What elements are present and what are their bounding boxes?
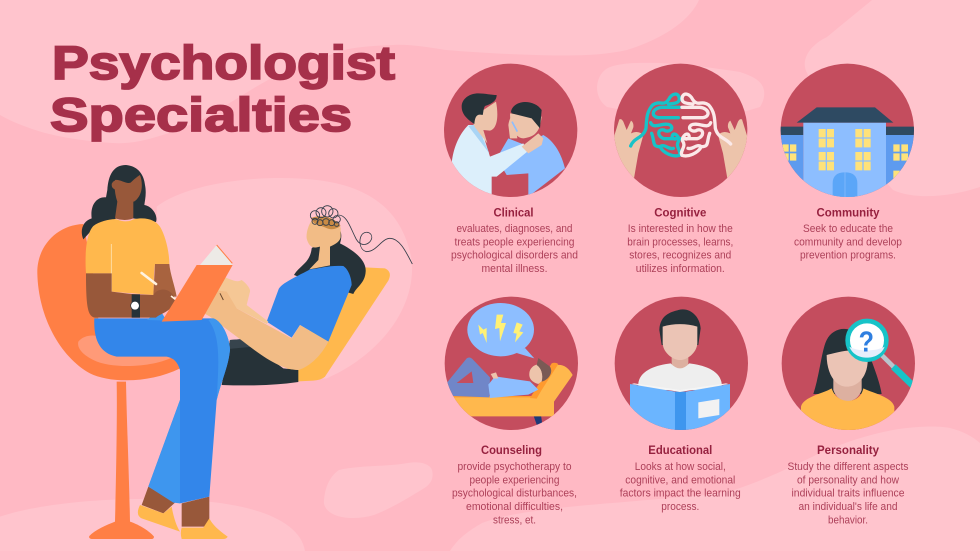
- panel: community: [777, 64, 917, 262]
- title: Specialties: [50, 88, 352, 141]
- description: [451, 223, 578, 275]
- description: [452, 461, 577, 526]
- description: individual traits influence: [792, 488, 904, 500]
- brain scribble: [310, 206, 412, 264]
- recliner: [287, 267, 390, 382]
- heading: Counseling: [481, 443, 542, 457]
- panel: personality: [782, 297, 915, 526]
- description: mental illness.: [482, 263, 548, 275]
- heading: Community: [816, 206, 880, 220]
- description: stress, et.: [493, 514, 536, 526]
- notebook: [162, 245, 233, 322]
- icon: community building: [777, 64, 917, 200]
- description: cognitive, and emotional: [625, 474, 735, 486]
- description: provide psychotherapy to: [458, 461, 572, 473]
- description: treats people experiencing: [454, 236, 574, 248]
- panel: educational: [615, 297, 748, 513]
- heading: Clinical: [494, 206, 534, 220]
- description: [794, 223, 902, 262]
- patient: [204, 206, 412, 385]
- description: brain processes, learns,: [627, 236, 733, 248]
- description: stores, recognizes and: [629, 250, 731, 262]
- panel: clinical: [444, 64, 578, 275]
- icon: student reading a book: [615, 297, 748, 432]
- description: behavior.: [828, 514, 868, 526]
- description: evaluates, diagnoses, and: [456, 223, 572, 235]
- description: emotional difficulties,: [466, 501, 563, 513]
- title: [50, 36, 395, 141]
- description: [620, 461, 741, 513]
- description: an individual's life and: [798, 501, 898, 513]
- backdrop blobs: [0, 178, 412, 551]
- description: Seek to educate the: [803, 223, 893, 235]
- icon: person with magnifier: [782, 297, 915, 432]
- illustration: psychologist and patient: [0, 165, 412, 551]
- description: [627, 223, 733, 275]
- chair: [37, 224, 180, 539]
- description: of personality and how: [797, 474, 899, 486]
- description: [788, 461, 909, 526]
- description: psychological disturbances,: [452, 488, 577, 500]
- description: utilizes information.: [636, 263, 725, 275]
- heading: Educational: [648, 443, 712, 457]
- icon: person with magnifier: ?: [859, 326, 874, 358]
- panel: cognitive: [610, 64, 751, 275]
- psychologist: [82, 165, 230, 539]
- icon: patient on couch with speech bubble: [445, 297, 578, 430]
- description: process.: [661, 501, 699, 513]
- icon: brain strands and hands: [610, 64, 751, 197]
- icon: doctor and patient: [444, 64, 577, 203]
- description: people experiencing: [470, 474, 560, 486]
- description: psychological disorders and: [451, 250, 578, 262]
- heading: Personality: [817, 443, 879, 457]
- description: Is interested in how the: [628, 223, 733, 235]
- description: Looks at how social,: [635, 461, 726, 473]
- heading: Cognitive: [654, 206, 707, 220]
- description: community and develop: [794, 236, 902, 248]
- description: prevention programs.: [800, 250, 896, 262]
- title: Psychologist: [52, 36, 395, 89]
- description: Study the different aspects: [788, 461, 909, 473]
- panel: counseling: [445, 297, 578, 526]
- description: factors impact the learning: [620, 488, 741, 500]
